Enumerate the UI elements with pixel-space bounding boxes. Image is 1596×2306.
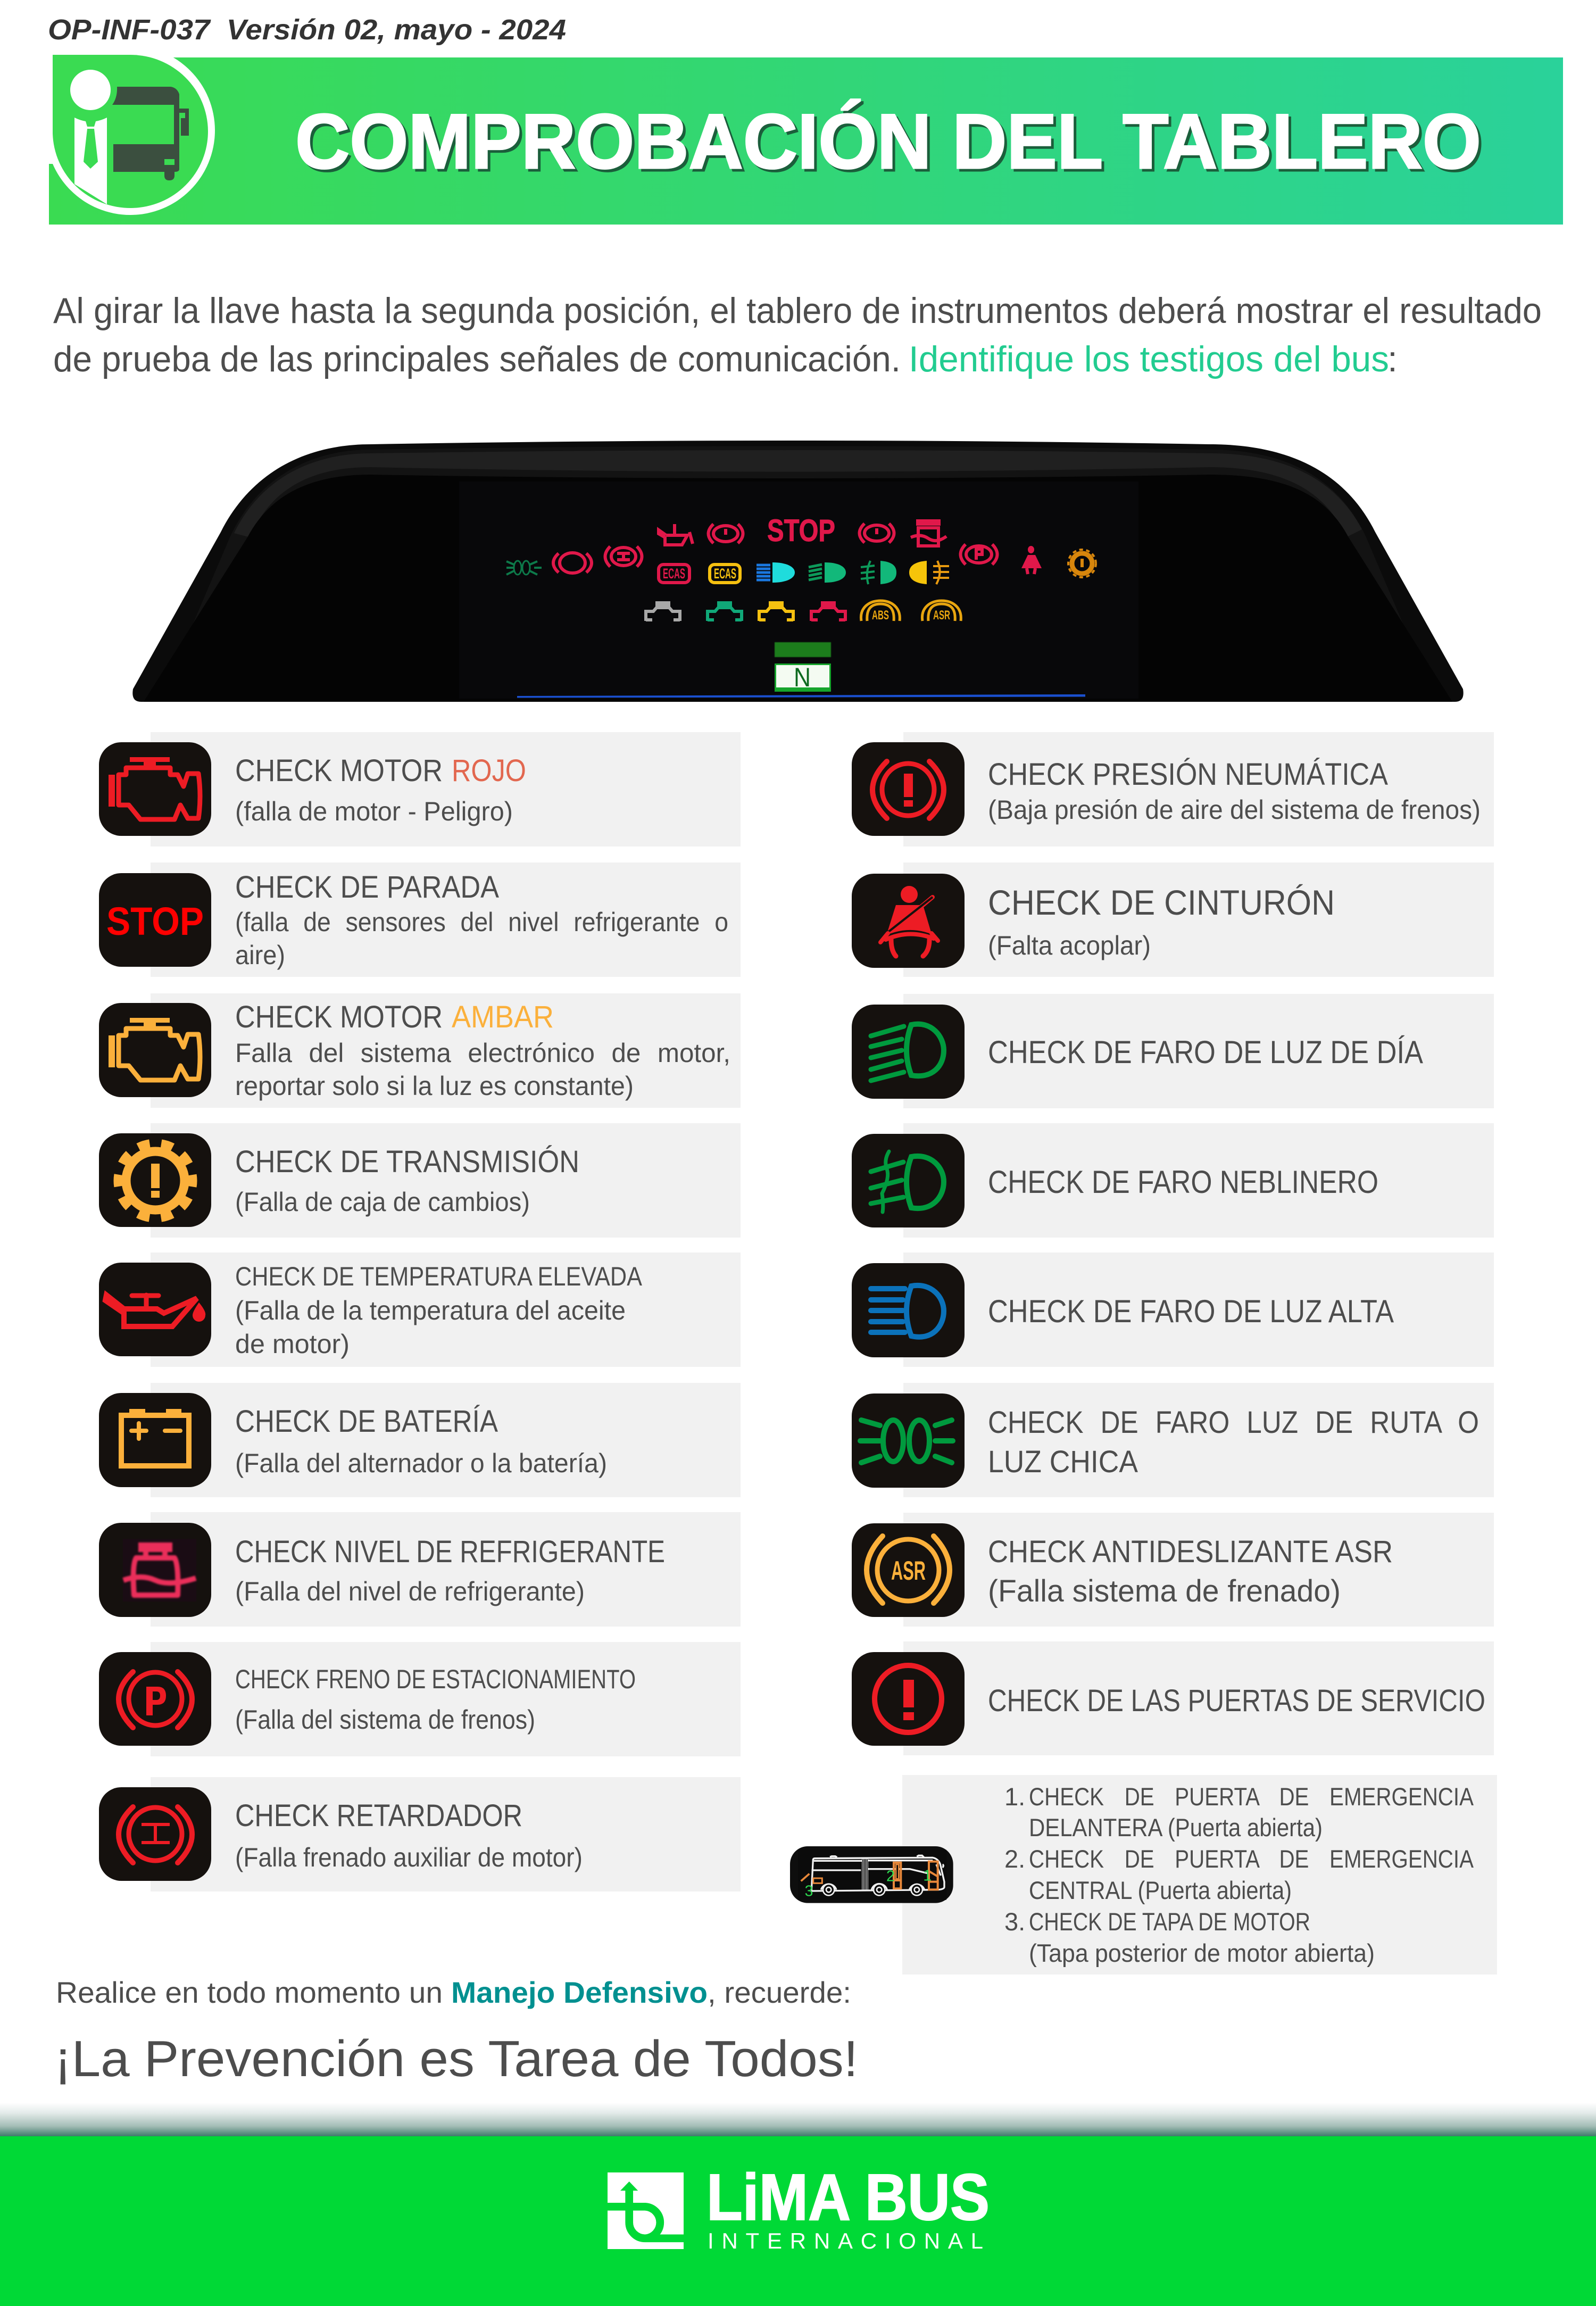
dashboard illustration	[132, 441, 1464, 702]
list text	[1004, 1782, 1474, 1967]
panel: emergency doors list	[902, 1775, 1497, 1975]
row: antideslizante asr	[852, 1513, 1494, 1627]
list text: CENTRAL (Puerta abierta)	[1029, 1876, 1292, 1904]
icon: parking brake	[99, 1652, 211, 1746]
row: freno de estacionamiento	[99, 1642, 741, 1756]
row: check motor rojo	[99, 732, 741, 847]
description	[235, 907, 728, 970]
row: nivel de refrigerante	[99, 1512, 741, 1627]
row: check de parada	[99, 862, 741, 977]
heading: CHECK ANTIDESLIZANTE ASR	[988, 1534, 1393, 1569]
panel	[903, 1513, 1494, 1627]
panel	[151, 732, 741, 847]
panel	[903, 1383, 1494, 1497]
icon: high beam	[852, 1263, 965, 1357]
panel	[903, 994, 1494, 1108]
panel	[151, 993, 741, 1108]
description: (Falla sistema de frenado)	[988, 1574, 1341, 1608]
title: COMPROBACIÓN DEL TABLERO	[295, 98, 1481, 185]
label: CHECK DE FARO DE LUZ ALTA	[988, 1293, 1394, 1329]
icon: retarder	[99, 1787, 211, 1881]
progress line	[517, 694, 1085, 698]
row: faro luz de ruta	[852, 1383, 1494, 1497]
row: cinturon	[852, 862, 1494, 977]
panel	[151, 1777, 741, 1892]
row: bateria	[99, 1383, 741, 1497]
description: aire)	[235, 940, 285, 970]
icon: bus door diagram	[790, 1846, 953, 1903]
panel	[903, 732, 1494, 847]
heading: CHECK DE TRANSMISIÓN	[235, 1144, 579, 1179]
intro text: Al girar la llave hasta la segunda posición, el tablero de instrumentos deberá mostrar el resultado	[53, 291, 1542, 331]
description: (Falla de caja de cambios)	[235, 1187, 530, 1217]
gear indicator	[775, 642, 831, 692]
list text: (Tapa posterior de motor abierta)	[1029, 1939, 1375, 1967]
heading: CHECK NIVEL DE REFRIGERANTE	[235, 1534, 665, 1569]
icon: battery	[99, 1393, 211, 1487]
warning lights row 1	[659, 513, 946, 548]
icon: asr: ASR	[891, 1556, 926, 1586]
heading: CHECK MOTOR	[235, 753, 443, 788]
panel	[151, 862, 741, 977]
closing sentence: , recuerde:	[708, 1976, 851, 2009]
warning lights row 3	[646, 601, 961, 623]
label: CHECK DE LAS PUERTAS DE SERVICIO	[988, 1683, 1485, 1718]
icon: engine amber	[99, 1003, 211, 1097]
description	[235, 1038, 730, 1101]
panel	[903, 1641, 1494, 1755]
highlighted colour: ROJO	[452, 753, 526, 788]
panel	[903, 1252, 1494, 1367]
description: (Falla del sistema de frenos)	[235, 1705, 535, 1735]
list text: 3.	[1004, 1907, 1025, 1936]
row: check de transmision	[99, 1123, 741, 1238]
panel	[151, 1252, 741, 1367]
heading: CHECK FRENO DE ESTACIONAMIENTO	[235, 1664, 636, 1694]
icon: stop	[99, 873, 211, 967]
description: (Falla del nivel de refrigerante)	[235, 1577, 585, 1606]
icon: fog lamp	[852, 1134, 965, 1227]
closing sentence: Realice en todo momento un	[56, 1976, 443, 2009]
label: CHECK DE FARO LUZ DE RUTA O	[988, 1405, 1479, 1440]
label: CHECK DE FARO DE LUZ DE DÍA	[988, 1034, 1423, 1070]
list text: DELANTERA (Puerta abierta)	[1029, 1813, 1323, 1842]
footer wordmark: LiMA BUS	[706, 2161, 990, 2234]
highlighted colour: AMBAR	[452, 1000, 554, 1034]
description	[235, 1296, 626, 1359]
warning lights row 3: ASR	[933, 608, 950, 623]
panel	[903, 862, 1494, 977]
icon: bus door diagram: 2	[886, 1868, 895, 1885]
heading: CHECK DE TEMPERATURA ELEVADA	[235, 1262, 643, 1291]
description: (Falla de la temperatura del aceite	[235, 1296, 626, 1325]
panel	[151, 1512, 741, 1627]
list text: CHECK DE TAPA DE MOTOR	[1029, 1907, 1310, 1936]
footer band	[0, 2136, 1596, 2306]
intro text: de prueba de las principales señales de comunicación.	[53, 339, 901, 379]
footer wordmark: INTERNACIONAL	[708, 2228, 983, 2253]
icon: engine red	[99, 742, 211, 836]
description: (Baja presión de aire del sistema de frenos)	[988, 795, 1481, 825]
intro text: Identifique los testigos del bus	[909, 339, 1389, 379]
panel	[151, 1123, 741, 1238]
icon: asr	[852, 1523, 965, 1617]
intro text: :	[1387, 339, 1398, 379]
title: COMPROBACIÓN DEL TABLERO	[298, 101, 1484, 187]
warning lights row 3: ABS	[872, 608, 889, 623]
icon: daylight lamp	[852, 1005, 965, 1099]
row: check motor ambar	[99, 993, 741, 1108]
row: presion neumatica	[852, 732, 1494, 847]
warning lights row 2	[506, 544, 1096, 584]
icon: stop: STOP	[106, 899, 204, 943]
label: CHECK DE FARO NEBLINERO	[988, 1164, 1378, 1200]
list text: CHECK DE PUERTA DE EMERGENCIA	[1029, 1845, 1474, 1873]
list text: 1.	[1004, 1782, 1025, 1811]
description: (Falla frenado auxiliar de motor)	[235, 1843, 583, 1872]
closing sentence	[56, 1976, 851, 2009]
row: retardador	[99, 1777, 741, 1892]
label: LUZ CHICA	[988, 1445, 1138, 1479]
description: (Falta acoplar)	[988, 931, 1151, 960]
footer gradient	[0, 2103, 1596, 2136]
description: reportar solo si la luz es constante)	[235, 1071, 634, 1101]
icon: bus door diagram: 3	[805, 1882, 813, 1899]
panel	[151, 1642, 741, 1756]
icon: oil can	[99, 1263, 211, 1356]
icon: driver and bus logo	[46, 46, 215, 215]
icon: bus door diagram: 1	[923, 1868, 932, 1885]
heading: CHECK MOTOR	[235, 1000, 443, 1034]
list text: CHECK DE PUERTA DE EMERGENCIA	[1029, 1782, 1474, 1811]
icon: gear warning	[99, 1133, 211, 1227]
heading: CHECK DE BATERÍA	[235, 1404, 498, 1439]
heading: CHECK DE CINTURÓN	[988, 883, 1335, 922]
icon: brake pressure	[852, 742, 965, 836]
document code: OP-INF-037 Versión 02, mayo - 2024	[48, 14, 566, 46]
panel	[151, 1383, 741, 1497]
header banner	[46, 46, 1563, 225]
row: faro luz de dia	[852, 994, 1494, 1108]
warning lights row 2: ECAS	[663, 566, 685, 582]
icon: coolant	[99, 1523, 211, 1617]
row: puertas de servicio	[852, 1641, 1494, 1755]
row: faro luz alta	[852, 1252, 1494, 1367]
icon: route lights	[852, 1393, 965, 1488]
panel	[903, 1123, 1494, 1238]
heading: CHECK PRESIÓN NEUMÁTICA	[988, 757, 1388, 792]
row: faro neblinero	[852, 1123, 1494, 1238]
icon: door warning	[852, 1652, 965, 1746]
gear indicator: N	[794, 662, 811, 692]
intro text	[53, 291, 1542, 379]
description: de motor)	[235, 1329, 350, 1359]
label	[988, 1405, 1479, 1479]
closing sentence: Manejo Defensivo	[451, 1976, 708, 2009]
description: (falla de motor - Peligro)	[235, 797, 513, 826]
description: (falla de sensores del nivel refrigerante o	[235, 907, 728, 937]
description: (Falla del alternador o la batería)	[235, 1448, 607, 1478]
warning lights row 2: ECAS	[714, 566, 736, 582]
slogan: ¡La Prevención es Tarea de Todos!	[54, 2030, 858, 2087]
heading: CHECK RETARDADOR	[235, 1798, 522, 1833]
heading: CHECK DE PARADA	[235, 870, 499, 905]
warning lights row 1: STOP	[767, 513, 835, 548]
footer logo mark	[608, 2172, 684, 2249]
list text: 2.	[1004, 1845, 1025, 1873]
row: temperatura elevada	[99, 1252, 741, 1367]
icon: seat belt	[852, 874, 965, 968]
description: Falla del sistema electrónico de motor,	[235, 1038, 730, 1068]
